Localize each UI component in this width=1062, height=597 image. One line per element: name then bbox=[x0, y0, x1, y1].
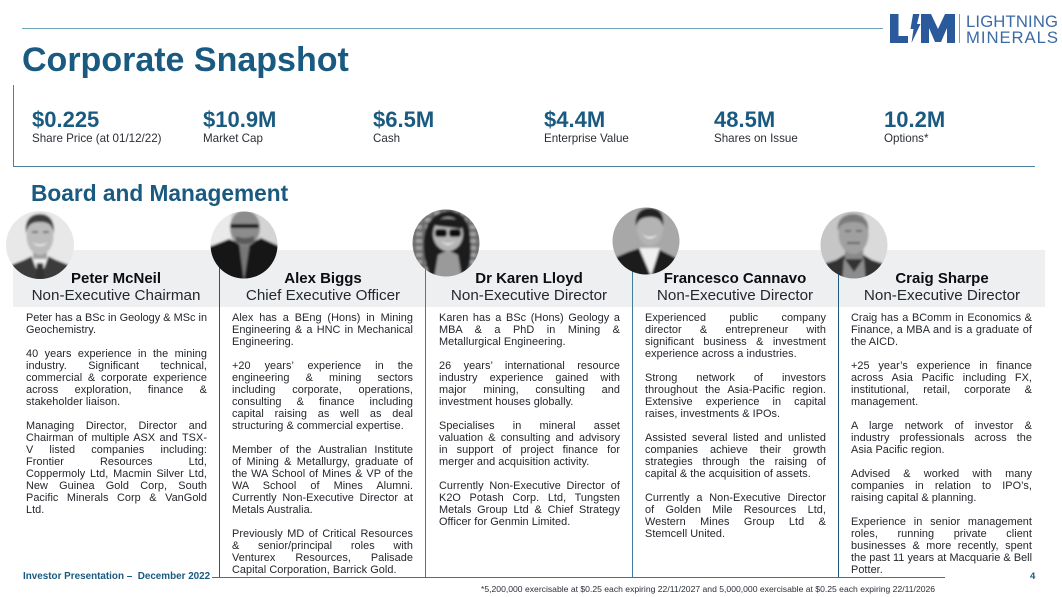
text block: Craig Sharpe bio: businesses & more recently, spent bbox=[851, 540, 1032, 552]
text block: Francesco Cannavo bio: strategies through the raising of bbox=[645, 456, 826, 468]
name: Alex Biggs bbox=[246, 270, 400, 304]
text block: Karen Lloyd bio: MBA & a PhD in Mining & bbox=[439, 324, 620, 336]
text block: Francesco Cannavo bio: companies achieve their growth bbox=[645, 444, 826, 456]
text block: Alex Biggs bio: Engineering. bbox=[232, 336, 294, 348]
text block: Alex Biggs bio: Venturex Resources, Palisade bbox=[232, 552, 413, 564]
stat: share price: Share Price (at 01/12/22) bbox=[32, 132, 162, 145]
heading: board and management: Board and Management bbox=[31, 180, 288, 206]
footnote: options: *5,200,000 exercisable at $0.25 each expiring 22/11/2027 and 5,000,000 exercisable at $0.25 each expiring 22/11/2026 bbox=[481, 584, 935, 594]
text block: Alex Biggs bio: Currently Non-Executive Director at bbox=[232, 492, 413, 504]
text block: Peter McNeil bio: commercial & corporate experience bbox=[26, 372, 207, 384]
text block: Alex Biggs bio: & senior/principal roles with bbox=[232, 540, 413, 552]
text block: Alex Biggs bio: the WA School of Mines & VP of the bbox=[232, 468, 413, 480]
top rule bbox=[22, 28, 883, 29]
stat: cash: $6.5M bbox=[373, 107, 434, 132]
stat: market cap: $10.9M bbox=[203, 107, 276, 132]
column divider 3 bbox=[632, 265, 633, 578]
text block: Karen Lloyd bio: Officer for Genmin Limited. bbox=[439, 516, 570, 528]
text block: Peter McNeil bio: 40 years experience in the mining bbox=[26, 348, 207, 360]
text block: Francesco Cannavo bio: experience across a industries. bbox=[645, 348, 797, 360]
name: Dr Karen Lloyd: Dr Karen Lloyd bbox=[475, 270, 583, 287]
column divider 2 bbox=[425, 265, 426, 578]
text block: Francesco Cannavo bio: Strong network of investors bbox=[645, 372, 826, 384]
text block: Francesco Cannavo bio: Extensive experience in capital bbox=[645, 396, 826, 408]
page number: 4 bbox=[1030, 571, 1035, 582]
text block: Craig Sharpe bio: Advised & worked with many bbox=[851, 468, 1032, 480]
name: Craig Sharpe: Non-Executive Director bbox=[864, 287, 1020, 304]
text block: Craig Sharpe bio: the AICD. bbox=[851, 336, 898, 348]
text block: Peter McNeil bio: stakeholder liaison. bbox=[26, 396, 120, 408]
text block: Karen Lloyd bio: Currently Non-Executive Director of bbox=[439, 480, 620, 492]
column divider 4 bbox=[838, 265, 839, 578]
name: Dr Karen Lloyd: Non-Executive Director bbox=[451, 287, 607, 304]
text block: Karen Lloyd bio: Metallurgical Engineering. bbox=[439, 336, 566, 348]
icon: photo of Alex Biggs bbox=[210, 212, 278, 278]
text block: Karen Lloyd bio: in support of project finance for bbox=[439, 444, 620, 456]
text block: Peter McNeil bio: Peter has a BSc in Geology & MSc in bbox=[26, 312, 207, 324]
text block: Karen Lloyd bio: major mining, consulting and bbox=[439, 384, 620, 396]
text block: Craig Sharpe bio: roles, running private client bbox=[851, 528, 1032, 540]
logo: Lightning Minerals: LIGHTNING bbox=[966, 12, 1058, 31]
text block: Craig Sharpe bio: the past 11 years at Macquarie & Bell bbox=[851, 552, 1032, 564]
text block: Alex Biggs bio: Alex has a BEng (Hons) in Mining bbox=[232, 312, 413, 324]
name: Peter McNeil: Non-Executive Chairman bbox=[32, 287, 200, 304]
text block: Craig Sharpe bio: across Asia Pacific including FX, bbox=[851, 372, 1032, 384]
text block: Peter McNeil bio: Frontier Resources Ltd, bbox=[26, 456, 207, 468]
text block: Alex Biggs bio: consulting & finance including bbox=[232, 396, 413, 408]
stat: enterprise value: Enterprise Value bbox=[544, 132, 629, 145]
text block: Karen Lloyd bio: valuation & consulting and advisory bbox=[439, 432, 620, 444]
text block: Karen Lloyd bio: Karen has a BSc (Hons) Geology a bbox=[439, 312, 620, 324]
name band bbox=[13, 250, 1045, 307]
text block: Peter McNeil bio: Managing Director, Director and bbox=[26, 420, 207, 432]
stat: options: 10.2M bbox=[884, 107, 945, 132]
column divider 1 bbox=[219, 265, 220, 578]
text block: Karen Lloyd bio bbox=[439, 312, 620, 528]
text block: Francesco Cannavo bio: Experienced public company bbox=[645, 312, 826, 324]
text block: Craig Sharpe bio: industry professionals across the bbox=[851, 432, 1032, 444]
text block: Alex Biggs bio: capital raising as well as deal bbox=[232, 408, 413, 420]
stat: share price bbox=[32, 107, 162, 145]
name: Francesco Cannavo: Francesco Cannavo bbox=[664, 270, 806, 287]
text block: Alex Biggs bio: WA School of Mines Alumni. bbox=[232, 480, 413, 492]
stat: options bbox=[884, 107, 945, 145]
text block: Francesco Cannavo bio: Stemcell United. bbox=[645, 528, 725, 540]
text block: Craig Sharpe bio: raising capital & planning. bbox=[851, 492, 976, 504]
text block: Alex Biggs bio: including corporate, operations, bbox=[232, 384, 413, 396]
text block: Craig Sharpe bio: Craig has a BComm in Economics & bbox=[851, 312, 1032, 324]
text block: Alex Biggs bio: Engineering & a HNC in Mechanical bbox=[232, 324, 413, 336]
text block: Francesco Cannavo bio bbox=[645, 312, 826, 540]
text block: Craig Sharpe bio bbox=[851, 312, 1032, 576]
stat: enterprise value bbox=[544, 107, 629, 145]
text block: Alex Biggs bio: +20 years’ experience in the bbox=[232, 360, 413, 372]
text block: Alex Biggs bio: structuring & commercial expertise. bbox=[232, 420, 404, 432]
bottom rule bbox=[212, 577, 945, 578]
text block: Karen Lloyd bio: Metals Group Ltd & Chief Strategy bbox=[439, 504, 620, 516]
text block: Craig Sharpe bio: Experience in senior management bbox=[851, 516, 1032, 528]
title: Corporate Snapshot bbox=[22, 41, 349, 79]
stat: shares on issue: Shares on Issue bbox=[714, 132, 798, 145]
stat: shares on issue bbox=[714, 107, 798, 145]
text block: Alex Biggs bio: Capital Corporation, Barrick Gold. bbox=[232, 564, 397, 576]
name: Peter McNeil bbox=[32, 270, 200, 304]
text block: Alex Biggs bio: Member of the Australian Institute bbox=[232, 444, 413, 456]
panel: stats frame bbox=[13, 85, 1035, 167]
text block: Karen Lloyd bio: 26 years’ international resource bbox=[439, 360, 620, 372]
stat: share price: $0.225 bbox=[32, 107, 99, 132]
text block: Peter McNeil bio: New Guinea Gold Corp, South bbox=[26, 480, 207, 492]
text block: Francesco Cannavo bio: director & entrepreneur with bbox=[645, 324, 826, 336]
text block: Karen Lloyd bio: Specialises in mineral asset bbox=[439, 420, 620, 432]
name: Francesco Cannavo: Non-Executive Director bbox=[657, 287, 813, 304]
stat: cash: Cash bbox=[373, 132, 400, 145]
text block: Craig Sharpe bio: Finance, a MBA and is a graduate of bbox=[851, 324, 1032, 336]
name: Peter McNeil: Peter McNeil bbox=[71, 270, 161, 287]
logo: Lightning Minerals bbox=[890, 12, 1058, 46]
text block: Peter McNeil bio: Geochemistry. bbox=[26, 324, 96, 336]
text block: Peter McNeil bio: across exploration, finance & bbox=[26, 384, 207, 396]
name: Dr Karen Lloyd bbox=[451, 270, 607, 304]
stat: market cap bbox=[203, 107, 276, 145]
text block: Craig Sharpe bio: Asia Pacific region. bbox=[851, 444, 945, 456]
text block: Karen Lloyd bio: merger and acquisition activity. bbox=[439, 456, 589, 468]
name: Craig Sharpe bbox=[864, 270, 1020, 304]
name: Francesco Cannavo bbox=[657, 270, 813, 304]
icon: photo of Dr Karen Lloyd bbox=[412, 210, 480, 276]
text block: Peter McNeil bio: Pacific Minerals Corp & VanGold bbox=[26, 492, 207, 504]
text block: Francesco Cannavo bio: Western Mines Group Ltd & bbox=[645, 516, 826, 528]
text block: Francesco Cannavo bio: throughout the Asia-Pacific region. bbox=[645, 384, 826, 396]
text block: Craig Sharpe bio: +25 year’s experience in finance bbox=[851, 360, 1032, 372]
text block: Peter McNeil bio: V listed companies including: bbox=[26, 444, 207, 456]
text block: Alex Biggs bio: Previously MD of Critical Resources bbox=[232, 528, 413, 540]
text block: Craig Sharpe bio: management. bbox=[851, 396, 918, 408]
name: Alex Biggs: Chief Executive Officer bbox=[246, 287, 400, 304]
icon: photo of Peter McNeil bbox=[6, 211, 74, 279]
text block: Peter McNeil bio: Chairman of multiple ASX and TSX- bbox=[26, 432, 207, 444]
text block: Peter McNeil bio: industry. Significant technical, bbox=[26, 360, 207, 372]
text block: Peter McNeil bio: Ltd. bbox=[26, 504, 44, 516]
text block: Karen Lloyd bio: industry experience gained with bbox=[439, 372, 620, 384]
text block: Karen Lloyd bio: investment houses globally. bbox=[439, 396, 573, 408]
text block: Craig Sharpe bio: companies in relation to IPO’s, bbox=[851, 480, 1032, 492]
footer: presentation label: Investor Presentation – December 2022 bbox=[23, 571, 210, 582]
text block: Alex Biggs bio bbox=[232, 312, 413, 576]
stat: market cap: Market Cap bbox=[203, 132, 263, 145]
text block: Peter McNeil bio bbox=[26, 312, 207, 516]
text block: Craig Sharpe bio: institutional, retail, corporate & bbox=[851, 384, 1032, 396]
text block: Karen Lloyd bio: K2O Potash Corp. Ltd, Tungsten bbox=[439, 492, 620, 504]
text block: Francesco Cannavo bio: Currently a Non-Executive Director bbox=[645, 492, 826, 504]
text block: Francesco Cannavo bio: significant business & investment bbox=[645, 336, 826, 348]
text block: Craig Sharpe bio: Potter. bbox=[851, 564, 883, 576]
text block: Craig Sharpe bio: A large network of investor & bbox=[851, 420, 1032, 432]
stat: shares on issue: 48.5M bbox=[714, 107, 775, 132]
text block: Alex Biggs bio: Metals Australia. bbox=[232, 504, 313, 516]
text block: Francesco Cannavo bio: of Golden Mile Resources Ltd, bbox=[645, 504, 826, 516]
text block: Alex Biggs bio: of Mining & Metallurgy, graduate of bbox=[232, 456, 413, 468]
stat: enterprise value: $4.4M bbox=[544, 107, 605, 132]
text block: Francesco Cannavo bio: Assisted several listed and unlisted bbox=[645, 432, 826, 444]
stat: cash bbox=[373, 107, 434, 145]
name: Alex Biggs: Alex Biggs bbox=[284, 270, 362, 287]
text block: Francesco Cannavo bio: capital & the acquisition of assets. bbox=[645, 468, 811, 480]
text block: Alex Biggs bio: engineering & mining sectors bbox=[232, 372, 413, 384]
icon: photo of Craig Sharpe bbox=[820, 212, 888, 278]
text block: Peter McNeil bio: Coppermoly Ltd, Macmin Silver Ltd, bbox=[26, 468, 207, 480]
name: Craig Sharpe: Craig Sharpe bbox=[895, 270, 989, 287]
icon: photo of Francesco Cannavo bbox=[612, 208, 680, 274]
stat: options: Options* bbox=[884, 132, 928, 145]
text block: Francesco Cannavo bio: raises, investments & IPOs. bbox=[645, 408, 780, 420]
